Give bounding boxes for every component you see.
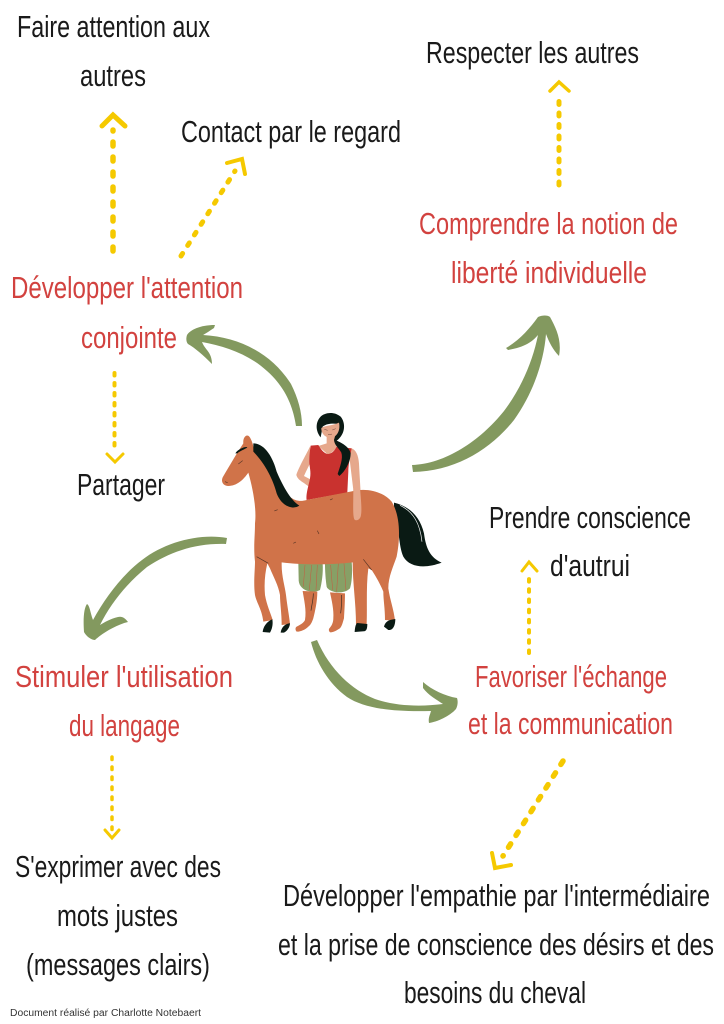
arrow: to comprendre la notion bbox=[412, 316, 560, 472]
woman's braid bbox=[334, 439, 351, 476]
dotted arrow: to respecter les autres bbox=[550, 82, 569, 185]
text: développer l'empathie bbox=[278, 878, 714, 1010]
illustration: woman and horse bbox=[222, 413, 442, 633]
text: faire attention aux autres bbox=[17, 9, 210, 93]
heading: comprendre la notion de liberté individuelle bbox=[419, 206, 678, 290]
woman's face bbox=[321, 423, 339, 438]
dotted arrow: to développer l'empathie bbox=[492, 761, 563, 868]
trouser stripes bbox=[303, 563, 346, 592]
woman's boots bbox=[296, 591, 317, 632]
horse hooves bbox=[263, 619, 395, 633]
arrow: to développer l'attention conjointe bbox=[186, 325, 302, 426]
horse body bbox=[222, 435, 399, 625]
footer credit: Document réalisé par Charlotte Notebaert bbox=[10, 1008, 201, 1019]
text: respecter les autres: Respecter les autres bbox=[426, 35, 639, 70]
heading: comprendre la notion de liberté individuelle: liberté individuelle bbox=[451, 255, 647, 290]
heading: favoriser l'échange et la communication bbox=[468, 659, 673, 741]
woman's trousers bbox=[298, 563, 323, 592]
horse details: eye, speckles, leg creases bbox=[225, 461, 372, 570]
text: faire attention aux autres: Faire attention aux bbox=[17, 9, 210, 44]
dotted arrow: to partager bbox=[107, 373, 123, 462]
text: partager: Partager bbox=[77, 467, 165, 502]
text: prendre conscience d'autrui: d'autrui bbox=[550, 548, 630, 583]
dotted arrow: to s'exprimer bbox=[105, 757, 119, 838]
woman's left arm bbox=[296, 447, 324, 490]
tail highlight bbox=[400, 505, 422, 542]
heading: stimuler l'utilisation du langage: Stimuler l'utilisation bbox=[15, 659, 233, 694]
text: faire attention aux autres: autres bbox=[80, 58, 146, 93]
heading: développer l'attention conjointe: Développer l'attention bbox=[11, 270, 243, 305]
heading: développer l'attention conjointe bbox=[11, 270, 243, 355]
dotted arrow: to faire attention bbox=[102, 115, 125, 251]
woman's facial features bbox=[324, 429, 336, 435]
heading: développer l'attention conjointe: conjointe bbox=[81, 320, 177, 355]
text: contact par le regard: Contact par le regard bbox=[181, 114, 401, 149]
arrow: to favoriser l'échange bbox=[311, 640, 458, 723]
arrow: to stimuler le langage bbox=[84, 537, 227, 640]
woman's red top bbox=[306, 445, 352, 500]
heading: stimuler l'utilisation du langage: du langage bbox=[69, 708, 180, 743]
woman's neck and chest bbox=[318, 435, 337, 455]
text: s'exprimer avec des mots justes: (messages clairs) bbox=[26, 947, 210, 982]
text: s'exprimer avec des mots justes bbox=[15, 849, 221, 982]
heading: stimuler l'utilisation du langage bbox=[15, 659, 233, 743]
woman's hand over horse bbox=[353, 487, 361, 520]
woman's right arm bbox=[348, 448, 361, 520]
horse mane bbox=[235, 443, 299, 507]
horse tail bbox=[394, 503, 442, 566]
woman's head and hair bbox=[317, 413, 344, 441]
text: s'exprimer avec des mots justes: mots justes bbox=[57, 898, 178, 933]
boot creases bbox=[311, 593, 342, 613]
dotted arrow: to contact par le regard bbox=[181, 159, 245, 256]
text: développer l'empathie: besoins du cheval bbox=[404, 975, 586, 1010]
text: prendre conscience d'autrui bbox=[489, 500, 691, 583]
dotted arrow: to prendre conscience bbox=[522, 562, 537, 653]
text: s'exprimer avec des mots justes: S'exprimer avec des bbox=[15, 849, 221, 884]
